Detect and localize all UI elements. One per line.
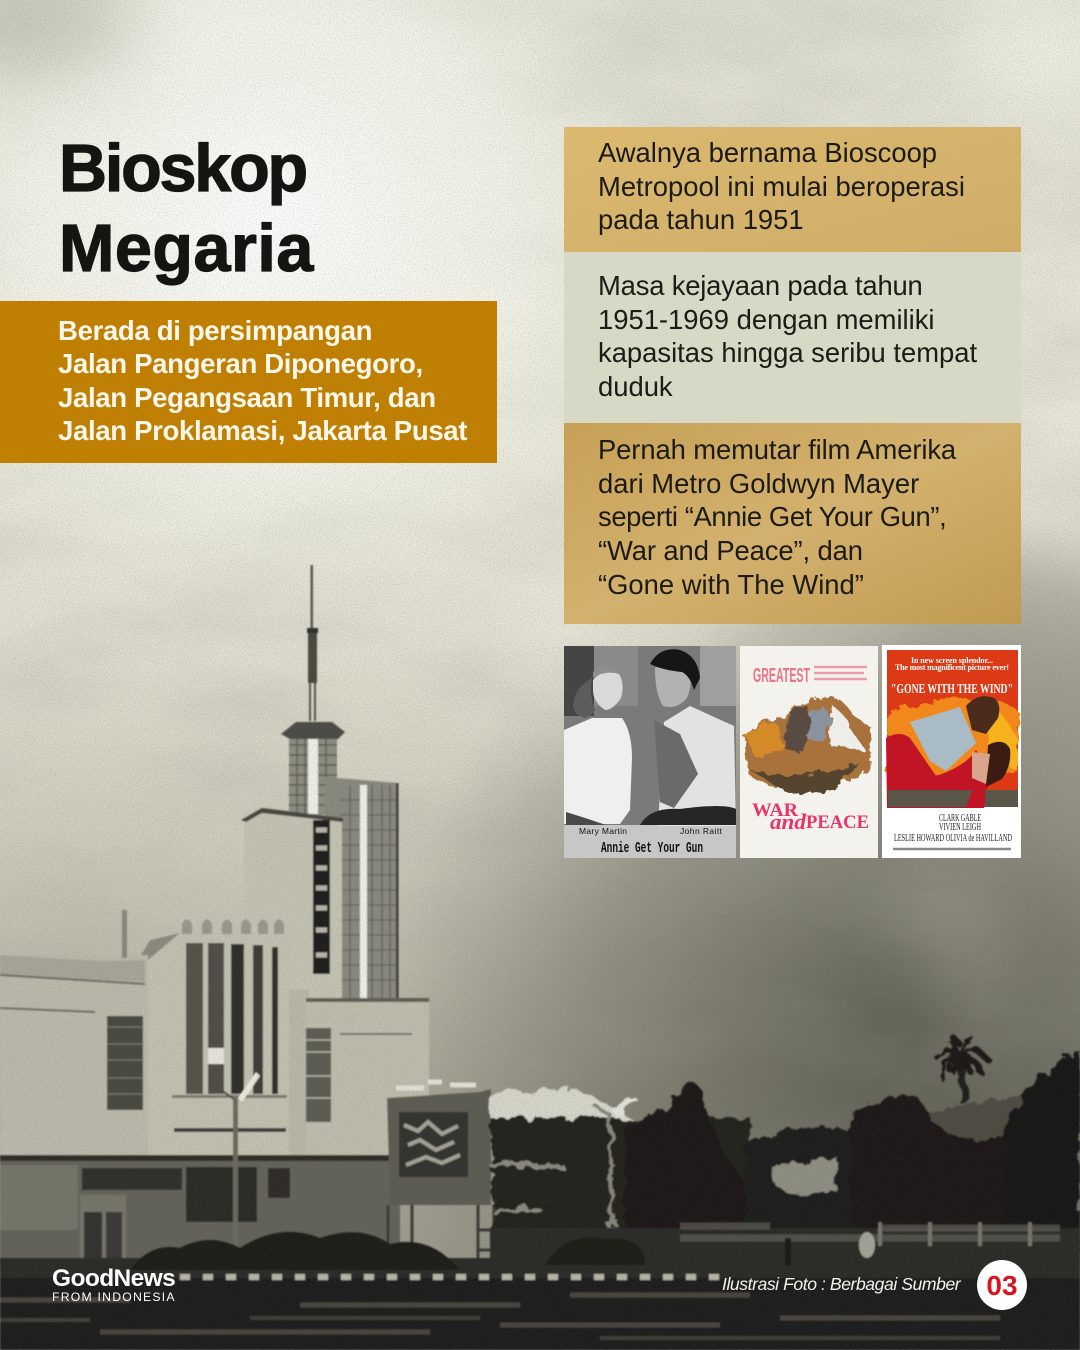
right wing bbox=[289, 990, 429, 1161]
left wing bbox=[0, 910, 148, 1161]
central art deco block bbox=[138, 920, 289, 1161]
poster: Gone with the Wind: CLARK GABLE bbox=[939, 813, 981, 824]
background buildings and trees bbox=[490, 1038, 1080, 1250]
poster: War and Peace: WAR bbox=[752, 800, 798, 821]
poster: War and Peace: PEACE bbox=[806, 812, 869, 833]
panel 2 background bbox=[564, 252, 1021, 423]
dark building bbox=[491, 1094, 751, 1250]
location text: Berada di persimpangan bbox=[58, 315, 372, 346]
ground floor band bbox=[0, 1155, 400, 1269]
page number badge: 03 bbox=[986, 1270, 1018, 1301]
poster: Annie Get Your Gun: Annie Get Your Gun bbox=[601, 840, 703, 857]
panel 2 text bbox=[598, 270, 977, 402]
panel 1 text: Awalnya bernama Bioscoop bbox=[598, 137, 937, 168]
street lamp bbox=[221, 1072, 260, 1248]
panel 2 text: duduk bbox=[598, 371, 673, 402]
poster: Gone with the Wind bbox=[882, 645, 1021, 858]
hedges bbox=[130, 1232, 460, 1270]
panel 3 text: Pernah memutar film Amerika bbox=[598, 434, 956, 465]
panel 1 text: pada tahun 1951 bbox=[598, 204, 804, 235]
trees centre bbox=[625, 1083, 758, 1250]
photo credit: Ilustrasi Foto : Berbagai Sumber bbox=[722, 1274, 960, 1294]
poster: Gone with the Wind: In new screen splendor... bbox=[911, 656, 993, 665]
poster: Gone with the Wind: VIVIEN LEIGH bbox=[939, 822, 981, 833]
ground bbox=[0, 1222, 1080, 1350]
panel 3 text bbox=[598, 434, 956, 600]
poster: War and Peace: and bbox=[770, 809, 807, 834]
poster: Annie Get Your Gun bbox=[564, 646, 736, 858]
palm tree bbox=[936, 1038, 986, 1104]
poster: Annie Get Your Gun: John Raitt bbox=[680, 826, 723, 836]
poster: War and Peace bbox=[740, 646, 878, 858]
panel 3 text: dari Metro Goldwyn Mayer bbox=[598, 468, 919, 499]
panel 2 text: Masa kejayaan pada tahun bbox=[598, 270, 923, 301]
vertical sign bbox=[313, 820, 330, 974]
location text: Jalan Proklamasi, Jakarta Pusat bbox=[58, 415, 467, 446]
location text bbox=[58, 315, 468, 446]
trees right bbox=[850, 1094, 1070, 1250]
checker post bbox=[859, 1232, 875, 1258]
tree far right bbox=[1005, 1050, 1080, 1250]
panel 1 text bbox=[598, 137, 965, 235]
poster: Gone with the Wind: "GONE WITH THE WIND" bbox=[891, 682, 1013, 697]
panel 1 background bbox=[564, 127, 1021, 252]
glass tower bbox=[325, 777, 399, 1002]
location text: Jalan Pangeran Diponegoro, bbox=[58, 348, 423, 379]
kerb blocks bbox=[180, 1274, 720, 1280]
building: Megaria cinema bbox=[0, 565, 494, 1272]
house bbox=[745, 1128, 860, 1240]
title: Megaria bbox=[59, 212, 314, 286]
poster caption: Mary Martin bbox=[579, 826, 627, 836]
title: Bioskop bbox=[59, 132, 306, 206]
panel 2 text: 1951-1969 dengan memiliki bbox=[598, 304, 935, 335]
page number badge bbox=[977, 1260, 1027, 1310]
rear glass building bbox=[925, 1096, 1030, 1170]
poster: War and Peace: GREATEST bbox=[753, 665, 810, 687]
panel 3 text: seperti “Annie Get Your Gun”, bbox=[598, 501, 946, 532]
panel 2 text: kapasitas hingga seribu tempat bbox=[598, 337, 977, 368]
location box bbox=[0, 301, 497, 463]
location text: Jalan Pegangsaan Timur, dan bbox=[58, 382, 436, 413]
panel 3 background bbox=[564, 423, 1021, 624]
title bbox=[59, 132, 314, 286]
panel 1 text: Metropool ini mulai beroperasi bbox=[598, 171, 965, 202]
distant cloud bbox=[490, 1086, 632, 1118]
poster: Gone with the Wind: The most magnificent picture ever! bbox=[895, 663, 1009, 672]
upper tower bbox=[281, 722, 345, 815]
billboard bbox=[387, 1082, 494, 1272]
logo: GoodNews from Indonesia: FROM INDONESIA bbox=[52, 1290, 176, 1304]
logo: GoodNews from Indonesia: GoodNews bbox=[52, 1265, 175, 1292]
front tower block bbox=[241, 808, 343, 1003]
panel 3 text: “War and Peace”, dan bbox=[598, 535, 863, 566]
spire bbox=[307, 565, 318, 721]
logo: GoodNews from Indonesia bbox=[52, 1265, 176, 1304]
panel 3 text: “Gone with The Wind” bbox=[598, 569, 864, 600]
